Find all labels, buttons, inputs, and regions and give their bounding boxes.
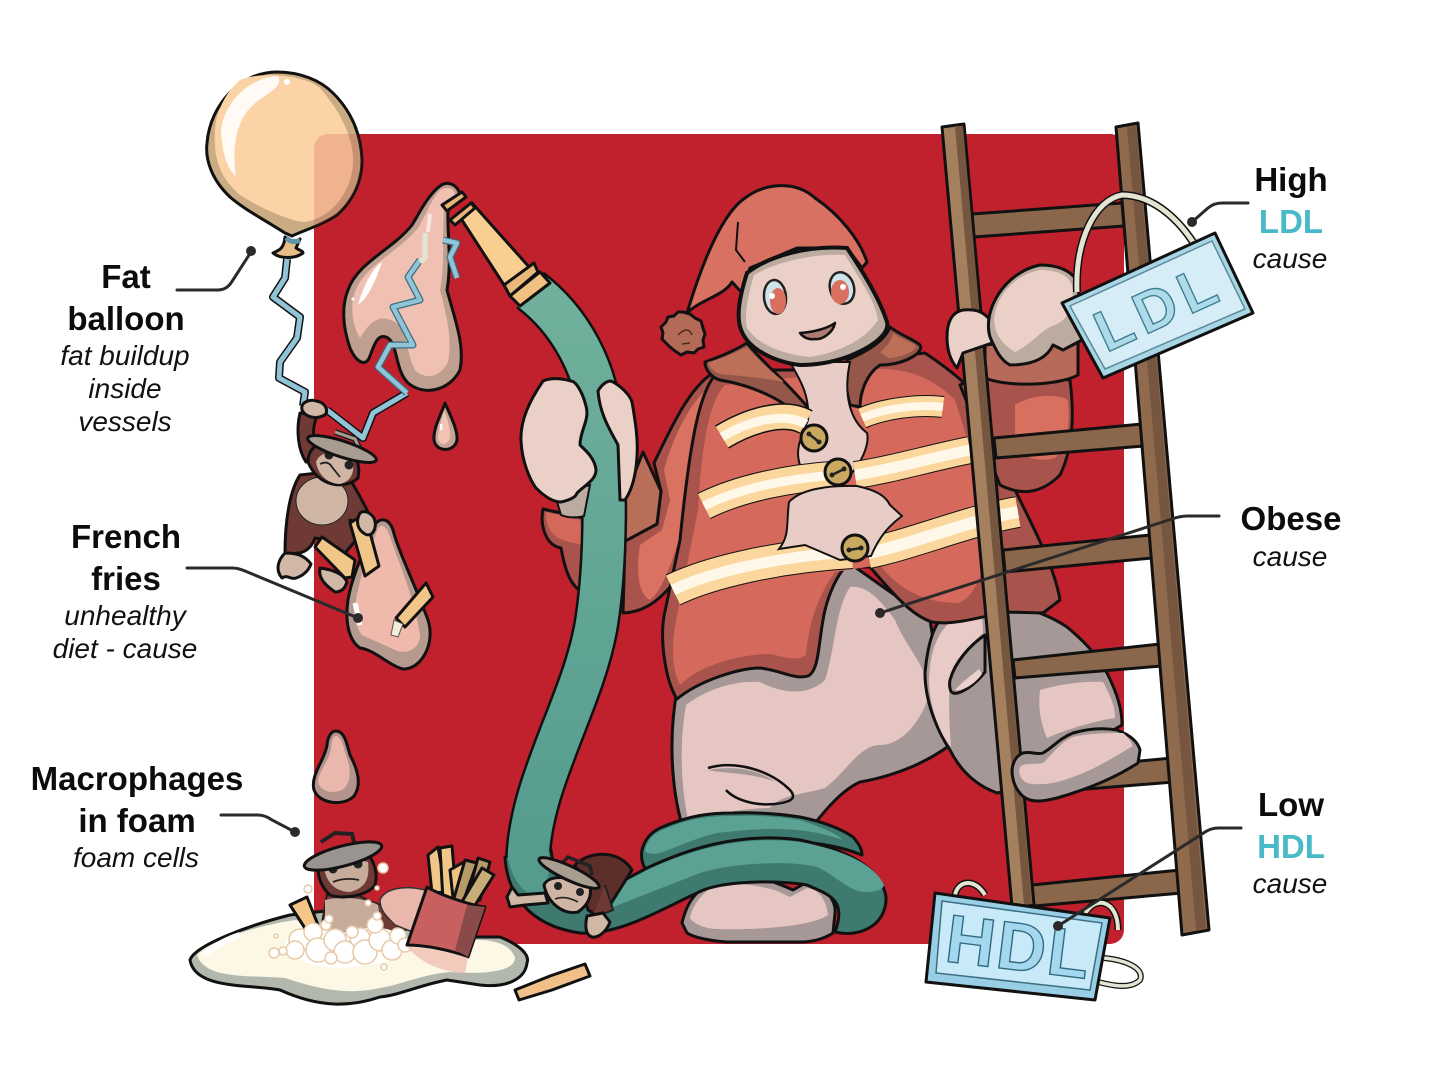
right arm with sleeve	[960, 335, 1078, 492]
red background panel	[314, 134, 1124, 944]
raised thigh	[925, 605, 1122, 793]
callout: high LDL: High	[1254, 161, 1328, 198]
monkey on hose	[507, 853, 632, 937]
head	[739, 247, 887, 365]
macrophage monkey in foam	[290, 833, 408, 936]
chest skin	[790, 362, 868, 478]
hose, far coil	[642, 813, 862, 880]
callout: high LDL	[1187, 161, 1328, 274]
callout: low HDL: HDL	[1257, 828, 1325, 865]
callout: obese	[875, 500, 1341, 618]
callout: macrophages: Macrophages	[31, 760, 243, 797]
ladder right rail	[1116, 123, 1209, 935]
callout: macrophages: foam cells	[73, 842, 199, 873]
callout: high LDL: cause	[1253, 243, 1327, 274]
callout: low HDL: Low	[1258, 786, 1324, 823]
callout: french fries: unhealthy	[64, 600, 188, 631]
callout: french fries: diet - cause	[53, 633, 197, 664]
callout: macrophages: in foam	[78, 802, 196, 839]
right hand on ladder	[947, 265, 1082, 368]
fatty deposit with fries	[315, 512, 433, 669]
callout: macrophages	[31, 760, 300, 873]
callout: high LDL: LDL	[1259, 203, 1323, 240]
balloon ribbon	[273, 259, 305, 406]
ladder left rail	[942, 124, 1034, 907]
stripes	[673, 406, 1018, 590]
monkey hanging from ribbon	[278, 400, 379, 592]
standing foot	[682, 878, 835, 942]
figure: obese person	[542, 186, 1122, 832]
sign: LDL on rope	[1062, 195, 1253, 378]
hose	[505, 290, 886, 933]
fries box	[407, 846, 494, 973]
hat	[661, 186, 867, 355]
ladder rungs	[972, 203, 1182, 906]
ladder	[942, 123, 1209, 935]
left arm	[542, 372, 720, 613]
large fat drop	[313, 731, 358, 803]
collar left	[705, 343, 810, 425]
callout: french fries: French	[71, 518, 181, 555]
raised foot	[1012, 729, 1140, 801]
callout: fat balloon: vessels	[78, 406, 172, 437]
callout: fat balloon: fat buildup	[60, 340, 190, 371]
sign: HDL on rope	[926, 883, 1141, 1000]
loose french fry	[515, 964, 590, 1000]
pink fat behind fries box	[380, 888, 425, 935]
callout: fat balloon: balloon	[67, 300, 185, 337]
right hand fingers on hose	[598, 381, 637, 500]
sign: LDL on rope: LDL	[1085, 250, 1233, 365]
fat puddle	[190, 905, 528, 1004]
shirt	[663, 353, 1060, 699]
collar right	[845, 327, 921, 407]
callout: fat balloon	[60, 246, 256, 437]
hose nozzle	[442, 192, 550, 306]
sign: HDL on rope: HDL	[942, 901, 1096, 994]
belly skin patch	[779, 486, 902, 560]
icon: fat balloon	[207, 72, 374, 258]
lower body	[672, 560, 950, 832]
fat blob at the hose nozzle	[327, 183, 461, 438]
small fat drop	[434, 403, 457, 449]
callout: fat balloon: Fat	[101, 258, 151, 295]
callout: low HDL: cause	[1253, 868, 1327, 899]
foam bubbles	[269, 863, 412, 970]
callout: obese: Obese	[1241, 500, 1341, 537]
callout: fat balloon: inside	[88, 373, 162, 404]
left hand gripping hose	[521, 379, 596, 517]
shirt buttons	[801, 425, 868, 561]
callout: french fries: fries	[91, 560, 161, 597]
callout: low HDL	[1053, 786, 1327, 931]
callout: french fries	[53, 518, 363, 664]
callout: obese: cause	[1253, 541, 1327, 572]
